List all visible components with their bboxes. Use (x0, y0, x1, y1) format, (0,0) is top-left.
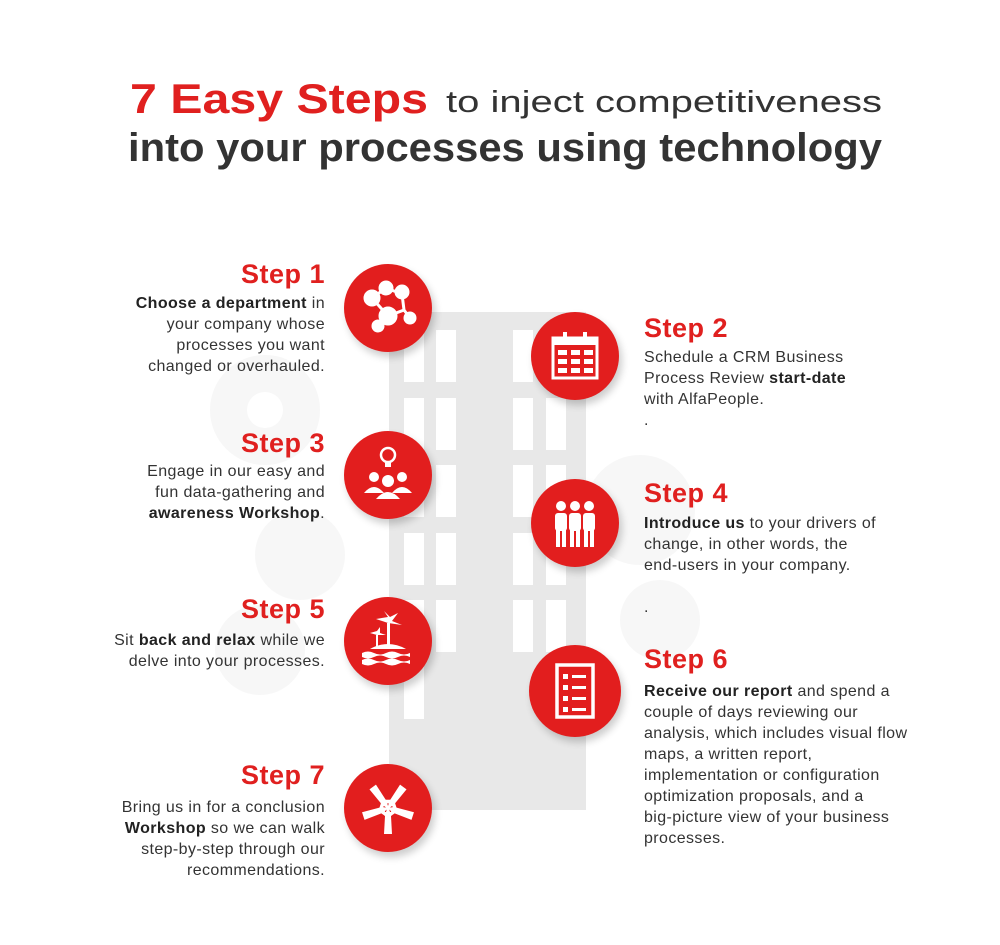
step 2 text: with AlfaPeople. (644, 391, 764, 408)
step 1 text: processes you want (176, 337, 325, 354)
step 3 text: Engage in our easy and (147, 463, 325, 480)
step 1 text: changed or overhauled. (148, 358, 325, 375)
step 1 text: Choose a department in (136, 295, 325, 312)
step 3 text: awareness Workshop. (149, 505, 325, 522)
step 6 text: optimization proposals, and a (644, 788, 864, 805)
step 6 text: Receive our report and spend a (644, 683, 890, 700)
step 2 heading: Step 2 (644, 313, 728, 343)
step 7 text: recommendations. (187, 862, 325, 879)
title: into your processes using technology (128, 126, 883, 170)
icon: people (531, 479, 619, 567)
title: 7 Easy Steps (130, 75, 428, 122)
step 6 text: analysis, which includes visual flow (644, 725, 907, 742)
icon: report (529, 645, 621, 737)
step 6 text: maps, a written report, (644, 746, 812, 763)
title: to inject competitiveness (446, 84, 882, 119)
step 5 heading: Step 5 (241, 594, 325, 624)
icon: workshop (344, 431, 432, 519)
step 2 text: Process Review start-date (644, 370, 846, 387)
step 3 text: fun data-gathering and (155, 484, 325, 501)
step 7 heading: Step 7 (241, 760, 325, 790)
step 6 text: implementation or configuration (644, 767, 880, 784)
step 6 text: couple of days reviewing our (644, 704, 858, 721)
step 1 heading: Step 1 (241, 259, 325, 289)
step 4 text (644, 515, 876, 616)
step 3 text (147, 463, 325, 522)
step 4 text: Introduce us to your drivers of (644, 515, 876, 532)
step 7 text: Workshop so we can walk (125, 820, 325, 837)
step 4 text: end-users in your company. (644, 557, 851, 574)
step 2 text: Schedule a CRM Business (644, 349, 844, 366)
step 5 text: Sit back and relax while we (114, 632, 325, 649)
step 1 text: your company whose (167, 316, 325, 333)
step 7 text: Bring us in for a conclusion (122, 799, 325, 816)
icon: calendar (531, 312, 619, 400)
step 4 heading: Step 4 (644, 478, 728, 508)
step 7 text: step-by-step through our (141, 841, 325, 858)
icon: network (344, 264, 432, 352)
title (128, 75, 883, 170)
step 4 text: change, in other words, the (644, 536, 848, 553)
step 5 text: delve into your processes. (129, 653, 325, 670)
step 2 text (644, 349, 846, 429)
step 7 text (122, 799, 325, 879)
step 6 text (644, 683, 908, 847)
icon: hands (344, 764, 432, 852)
icon: island (344, 597, 432, 685)
step 1 text (136, 295, 325, 375)
step 4 text: . (644, 599, 649, 616)
step 2 text: . (644, 412, 649, 429)
step 6 text: big-picture view of your business (644, 809, 889, 826)
step 3 heading: Step 3 (241, 428, 325, 458)
step 6 text: processes. (644, 830, 725, 847)
step 6 heading: Step 6 (644, 644, 728, 674)
step 5 text (114, 632, 325, 670)
